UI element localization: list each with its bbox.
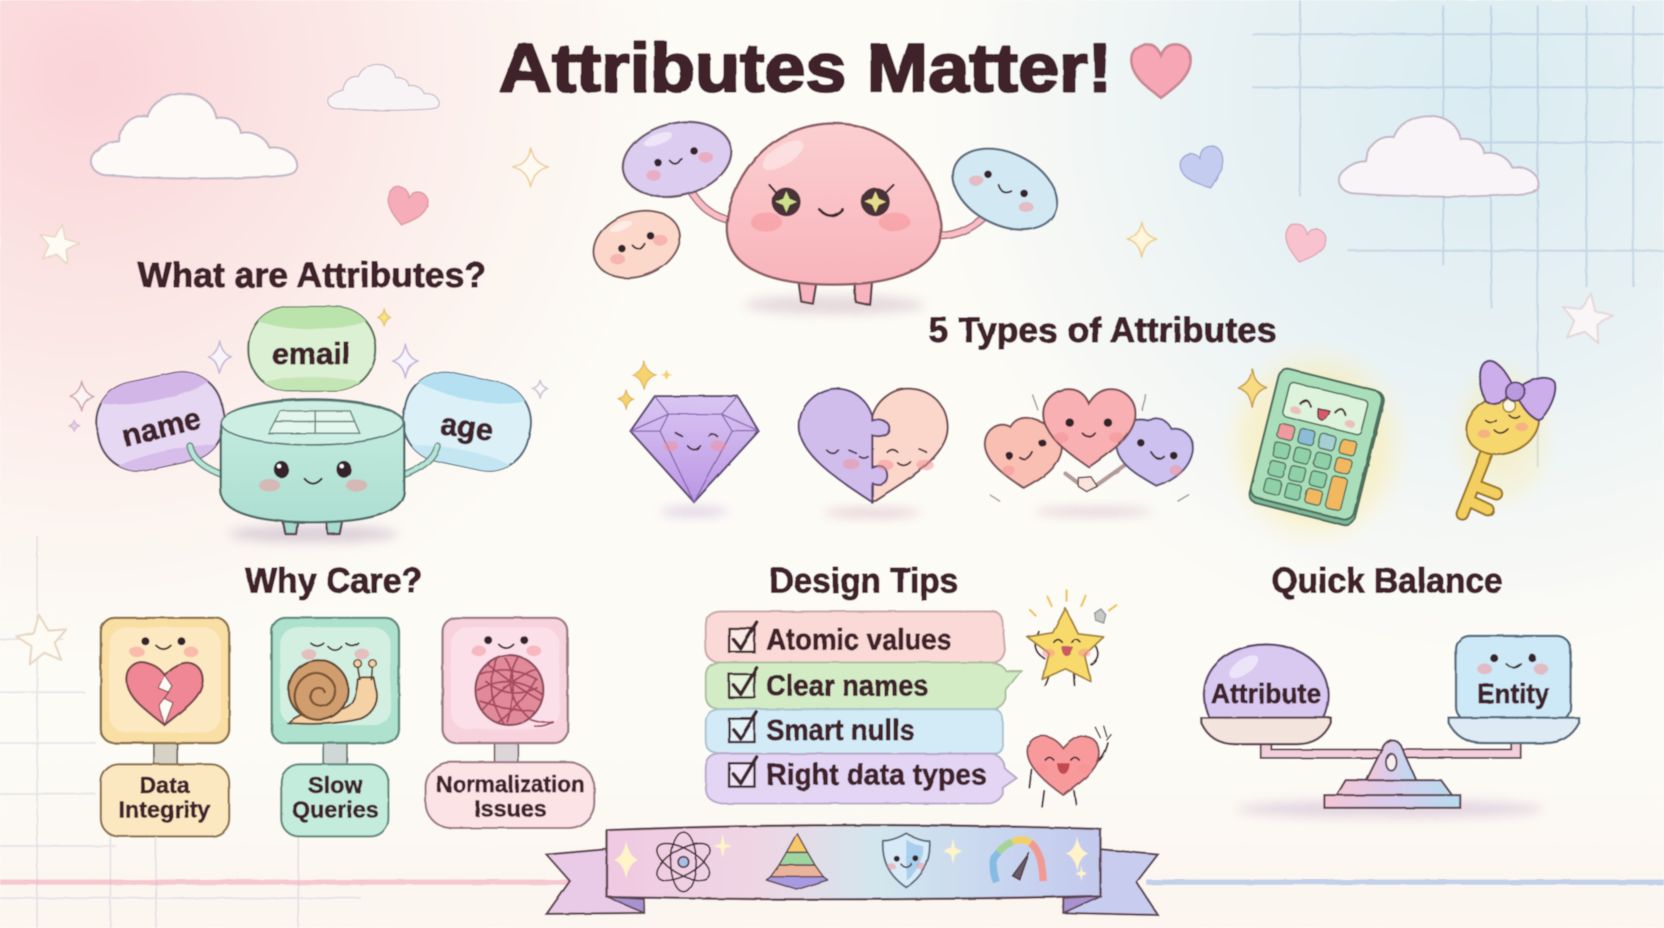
ribbon banner bbox=[547, 825, 1158, 915]
connector bbox=[495, 743, 518, 764]
mascot arms and legs bbox=[798, 278, 872, 305]
scale beam bbox=[1261, 742, 1521, 758]
attribute weight bbox=[1204, 644, 1329, 719]
connector bbox=[154, 743, 177, 766]
icon: linked hearts type bbox=[985, 389, 1193, 516]
label: data integrity bbox=[101, 764, 229, 836]
database arms bbox=[190, 446, 225, 476]
ribbon left tail bbox=[547, 849, 644, 914]
label: normalization issues bbox=[426, 762, 594, 828]
icon: sparkles bbox=[69, 148, 1157, 431]
mascot with held blobs bbox=[584, 111, 1070, 314]
icon: decorative stars bbox=[14, 221, 1616, 666]
email bubble: email bbox=[272, 336, 350, 371]
icon: cloud left small bbox=[328, 64, 439, 110]
label: normalization issues: Issues bbox=[474, 795, 547, 821]
mascot face bbox=[750, 185, 911, 232]
peach blob bbox=[584, 199, 690, 289]
label: data integrity: Integrity bbox=[118, 796, 211, 822]
card: broken heart bbox=[101, 618, 229, 743]
label: slow queries bbox=[281, 764, 388, 836]
ribbon folds bbox=[607, 896, 1100, 913]
email bubble bbox=[246, 304, 377, 392]
heading: 5 types of attributes: 5 Types of Attributes bbox=[929, 311, 1277, 350]
mascot body bbox=[727, 123, 941, 285]
tip: right data types: Right data types bbox=[766, 758, 987, 791]
name bubble: name bbox=[118, 400, 205, 454]
icon: atom bbox=[651, 832, 716, 892]
ribbon main band bbox=[607, 825, 1100, 899]
panel: what are attributes illustration bbox=[86, 295, 538, 543]
label: data integrity: Data bbox=[139, 772, 191, 798]
database legs bbox=[282, 518, 343, 534]
right bowl bbox=[1449, 718, 1579, 743]
database body bbox=[221, 399, 404, 522]
label: slow queries: Slow bbox=[308, 772, 363, 798]
connector bbox=[324, 743, 347, 766]
age bubble bbox=[401, 371, 533, 473]
heading: design tips: Design Tips bbox=[769, 561, 958, 600]
database face bbox=[259, 461, 367, 492]
label: normalization issues: Normalization bbox=[436, 771, 585, 797]
entity weight bbox=[1456, 636, 1571, 721]
tip: smart nulls: Smart nulls bbox=[766, 714, 915, 747]
panel: why care data integrity bbox=[101, 618, 229, 836]
icon: gauge bbox=[993, 839, 1043, 882]
heading: what are attributes: What are Attributes? bbox=[138, 256, 486, 295]
name bubble bbox=[94, 370, 226, 472]
database shadow bbox=[228, 526, 398, 543]
purple blob bbox=[615, 111, 739, 208]
tip: smart nulls bbox=[706, 709, 1003, 754]
heading: quick balance: Quick Balance bbox=[1271, 561, 1503, 600]
tip: right data types bbox=[706, 754, 1017, 804]
tip: clear names: Clear names bbox=[766, 669, 929, 702]
title: Attributes Matter! bbox=[499, 30, 1112, 107]
table icon on database bbox=[268, 411, 360, 433]
tip: clear names bbox=[706, 662, 1021, 709]
mascot shadow bbox=[744, 295, 924, 314]
icon: waving heart bbox=[1027, 726, 1111, 807]
icon: cloud left large bbox=[91, 94, 297, 179]
ribbon right tail bbox=[1063, 849, 1158, 915]
card: tangled yarn bbox=[443, 618, 568, 743]
age bubble: age bbox=[438, 406, 496, 448]
ribbon sparkles bbox=[614, 834, 1089, 881]
icon: calculator type bbox=[1218, 340, 1414, 552]
icon: cheering star bbox=[1027, 590, 1116, 686]
icon: puzzle heart type bbox=[799, 389, 948, 517]
heading: why care: Why Care? bbox=[245, 561, 422, 600]
icon: key type bbox=[1448, 355, 1558, 516]
attribute weight: Attribute bbox=[1211, 678, 1321, 709]
scale base and fulcrum bbox=[1324, 740, 1460, 808]
icon: shield bbox=[883, 833, 930, 887]
blue blob bbox=[940, 133, 1070, 246]
left bowl bbox=[1201, 718, 1331, 744]
panel: design tips list bbox=[706, 612, 1021, 804]
icon: cloud right bbox=[1339, 116, 1539, 197]
panel: why care slow queries bbox=[272, 618, 399, 836]
icon: decorative hearts bbox=[382, 143, 1328, 267]
icon: pyramid bbox=[766, 833, 828, 890]
icon: title heart bbox=[1131, 44, 1191, 98]
card: snail bbox=[272, 618, 399, 743]
entity weight: Entity bbox=[1477, 678, 1550, 709]
scale shadow bbox=[1236, 799, 1544, 818]
tip: atomic values: Atomic values bbox=[766, 624, 952, 657]
label: slow queries: Queries bbox=[292, 796, 379, 822]
panel: quick balance scale bbox=[1201, 636, 1579, 818]
icon: gem type bbox=[619, 361, 759, 516]
panel: why care normalization issues bbox=[426, 618, 594, 828]
tip: atomic values bbox=[706, 612, 1005, 662]
